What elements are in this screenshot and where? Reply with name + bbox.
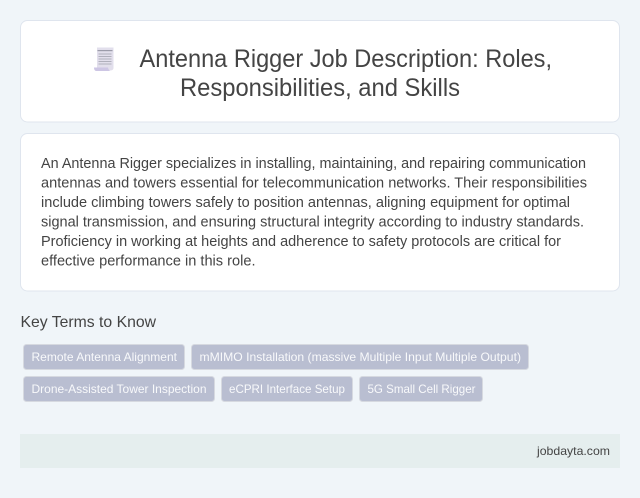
panel: title card [20, 20, 620, 122]
footer [20, 434, 620, 468]
chip: 5G Small Cell Rigger [360, 376, 482, 402]
text block: description: signal transmission, and ensuring structural integrity according to industry standards. [41, 214, 584, 230]
chip: 5G Small Cell Rigger: 5G Small Cell Rigger [368, 382, 476, 396]
text block: description: An Antenna Rigger specializes in installing, maintaining, and repairing communication [41, 156, 586, 172]
heading: key terms: Key Terms to Know [20, 314, 156, 331]
chip: mMIMO Installation: mMIMO Installation (massive Multiple Input Multiple Output) [200, 350, 521, 364]
text block: description: effective performance in this role. [41, 254, 256, 270]
footer: jobdayta.com [536, 444, 610, 458]
icon: document scroll [94, 48, 114, 71]
text block: description [41, 156, 587, 270]
title [140, 45, 552, 102]
chip: Drone-Assisted Tower Inspection: Drone-Assisted Tower Inspection [32, 382, 206, 396]
text block: description: Proficiency in working at heights and adherence to safety protocols are critical for [41, 234, 561, 250]
chip: Remote Antenna Alignment: Remote Antenna Alignment [32, 350, 178, 364]
chip: eCPRI Interface Setup: eCPRI Interface Setup [229, 382, 345, 396]
title: Antenna Rigger Job Description: Roles, [140, 45, 552, 73]
chip: Remote Antenna Alignment [24, 344, 184, 370]
panel: description [20, 134, 620, 291]
chip: eCPRI Interface Setup [222, 376, 352, 402]
title: Responsibilities, and Skills [180, 74, 460, 102]
text block: description: antennas and towers essential for telecommunication networks. Their responsibilities [41, 176, 587, 192]
chip: Drone-Assisted Tower Inspection [24, 376, 214, 402]
text block: description: include climbing towers safely to position antennas, aligning equipment for optimal [41, 195, 570, 211]
chip: mMIMO Installation [192, 344, 528, 370]
